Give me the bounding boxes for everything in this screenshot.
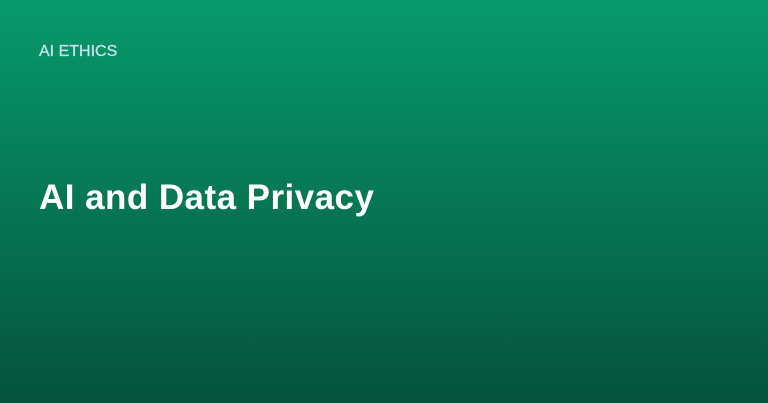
category label: AI ETHICS (39, 43, 117, 60)
title: AI and Data Privacy (39, 178, 374, 217)
